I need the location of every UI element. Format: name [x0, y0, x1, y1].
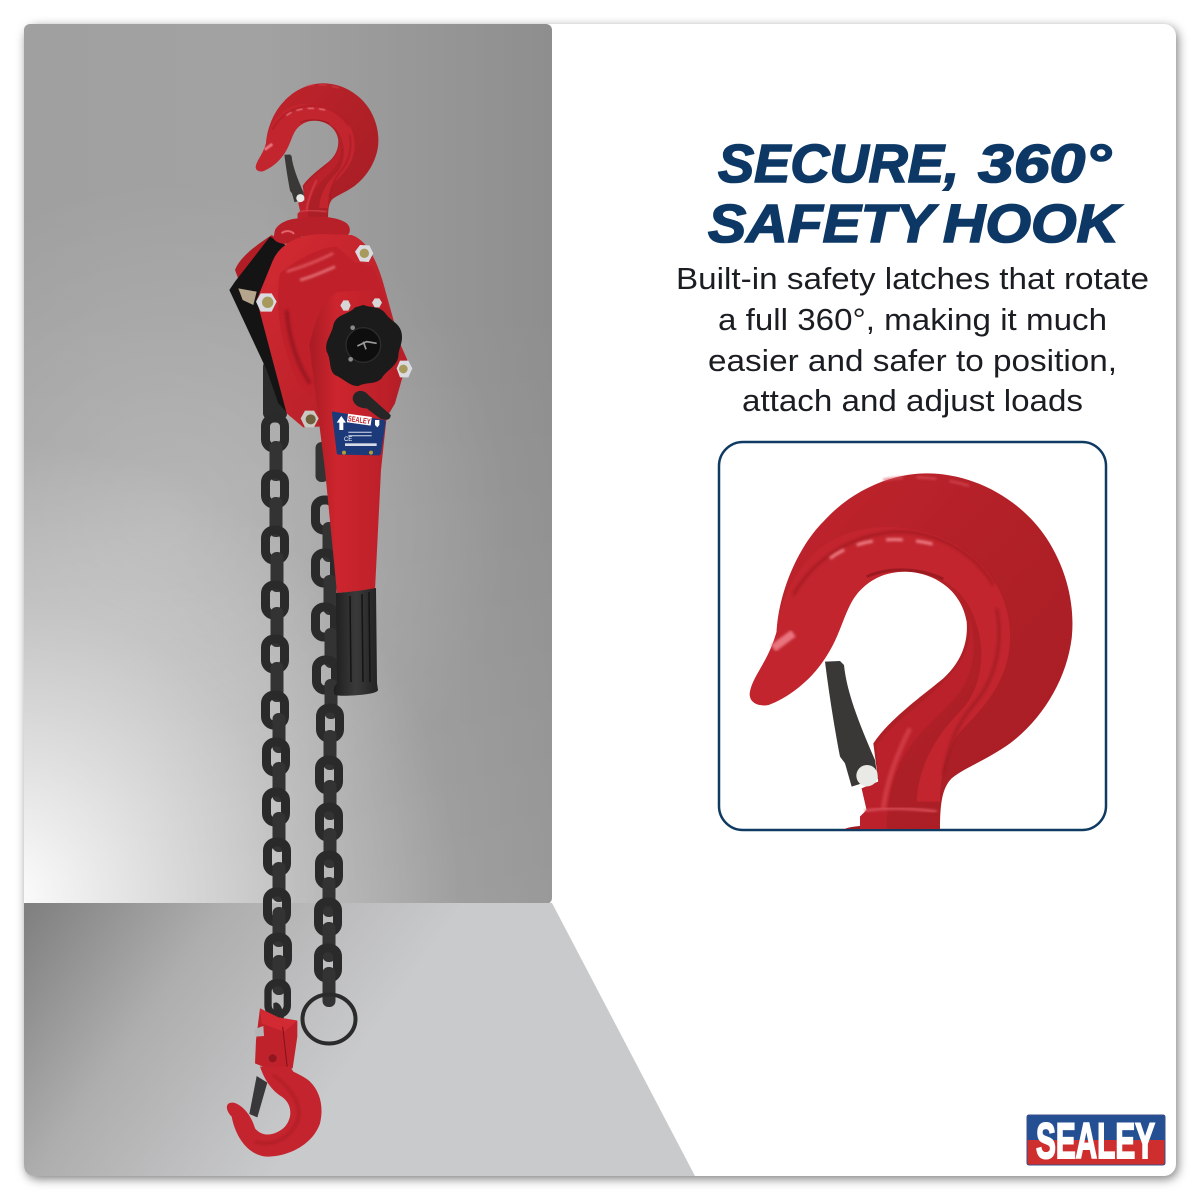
hook close-up panel — [719, 442, 1106, 835]
bolts — [256, 245, 412, 427]
grey studio floor — [24, 903, 695, 1176]
description text: a full 360°, making it much — [718, 302, 1107, 337]
lever hoist body — [229, 83, 412, 593]
close-up hook photo — [750, 473, 1072, 835]
lever handle — [309, 290, 400, 593]
swivel block — [273, 217, 350, 244]
bottom load hook and block — [227, 983, 322, 1157]
warning label: CE — [344, 437, 352, 443]
right chain with pull ring — [302, 442, 356, 1044]
description text: attach and adjust loads — [742, 383, 1083, 418]
raised housing — [278, 247, 387, 403]
back plate — [235, 235, 288, 283]
rubber hand grip — [334, 588, 378, 696]
grey studio wall background — [24, 24, 552, 904]
left chain — [263, 360, 288, 995]
warning label: SEALEY — [347, 414, 372, 426]
top hook — [256, 83, 378, 219]
description text: easier and safer to position, — [708, 343, 1117, 378]
main plate — [257, 234, 407, 427]
description text: Built-in safety latches that rotate — [676, 261, 1149, 296]
adjustment knob — [326, 305, 402, 386]
headline: SECURE, — [718, 134, 959, 194]
hook — [227, 1067, 322, 1157]
swivel block — [255, 1008, 297, 1072]
latch — [249, 1076, 267, 1117]
direction lever — [353, 391, 391, 420]
chain-end link — [268, 983, 287, 1014]
headline: HOOK — [943, 194, 1123, 254]
description text — [676, 261, 1149, 418]
headline — [708, 134, 1123, 254]
headline: 360° — [978, 134, 1111, 194]
headline: SAFETY — [708, 194, 939, 254]
warning label — [332, 411, 386, 455]
